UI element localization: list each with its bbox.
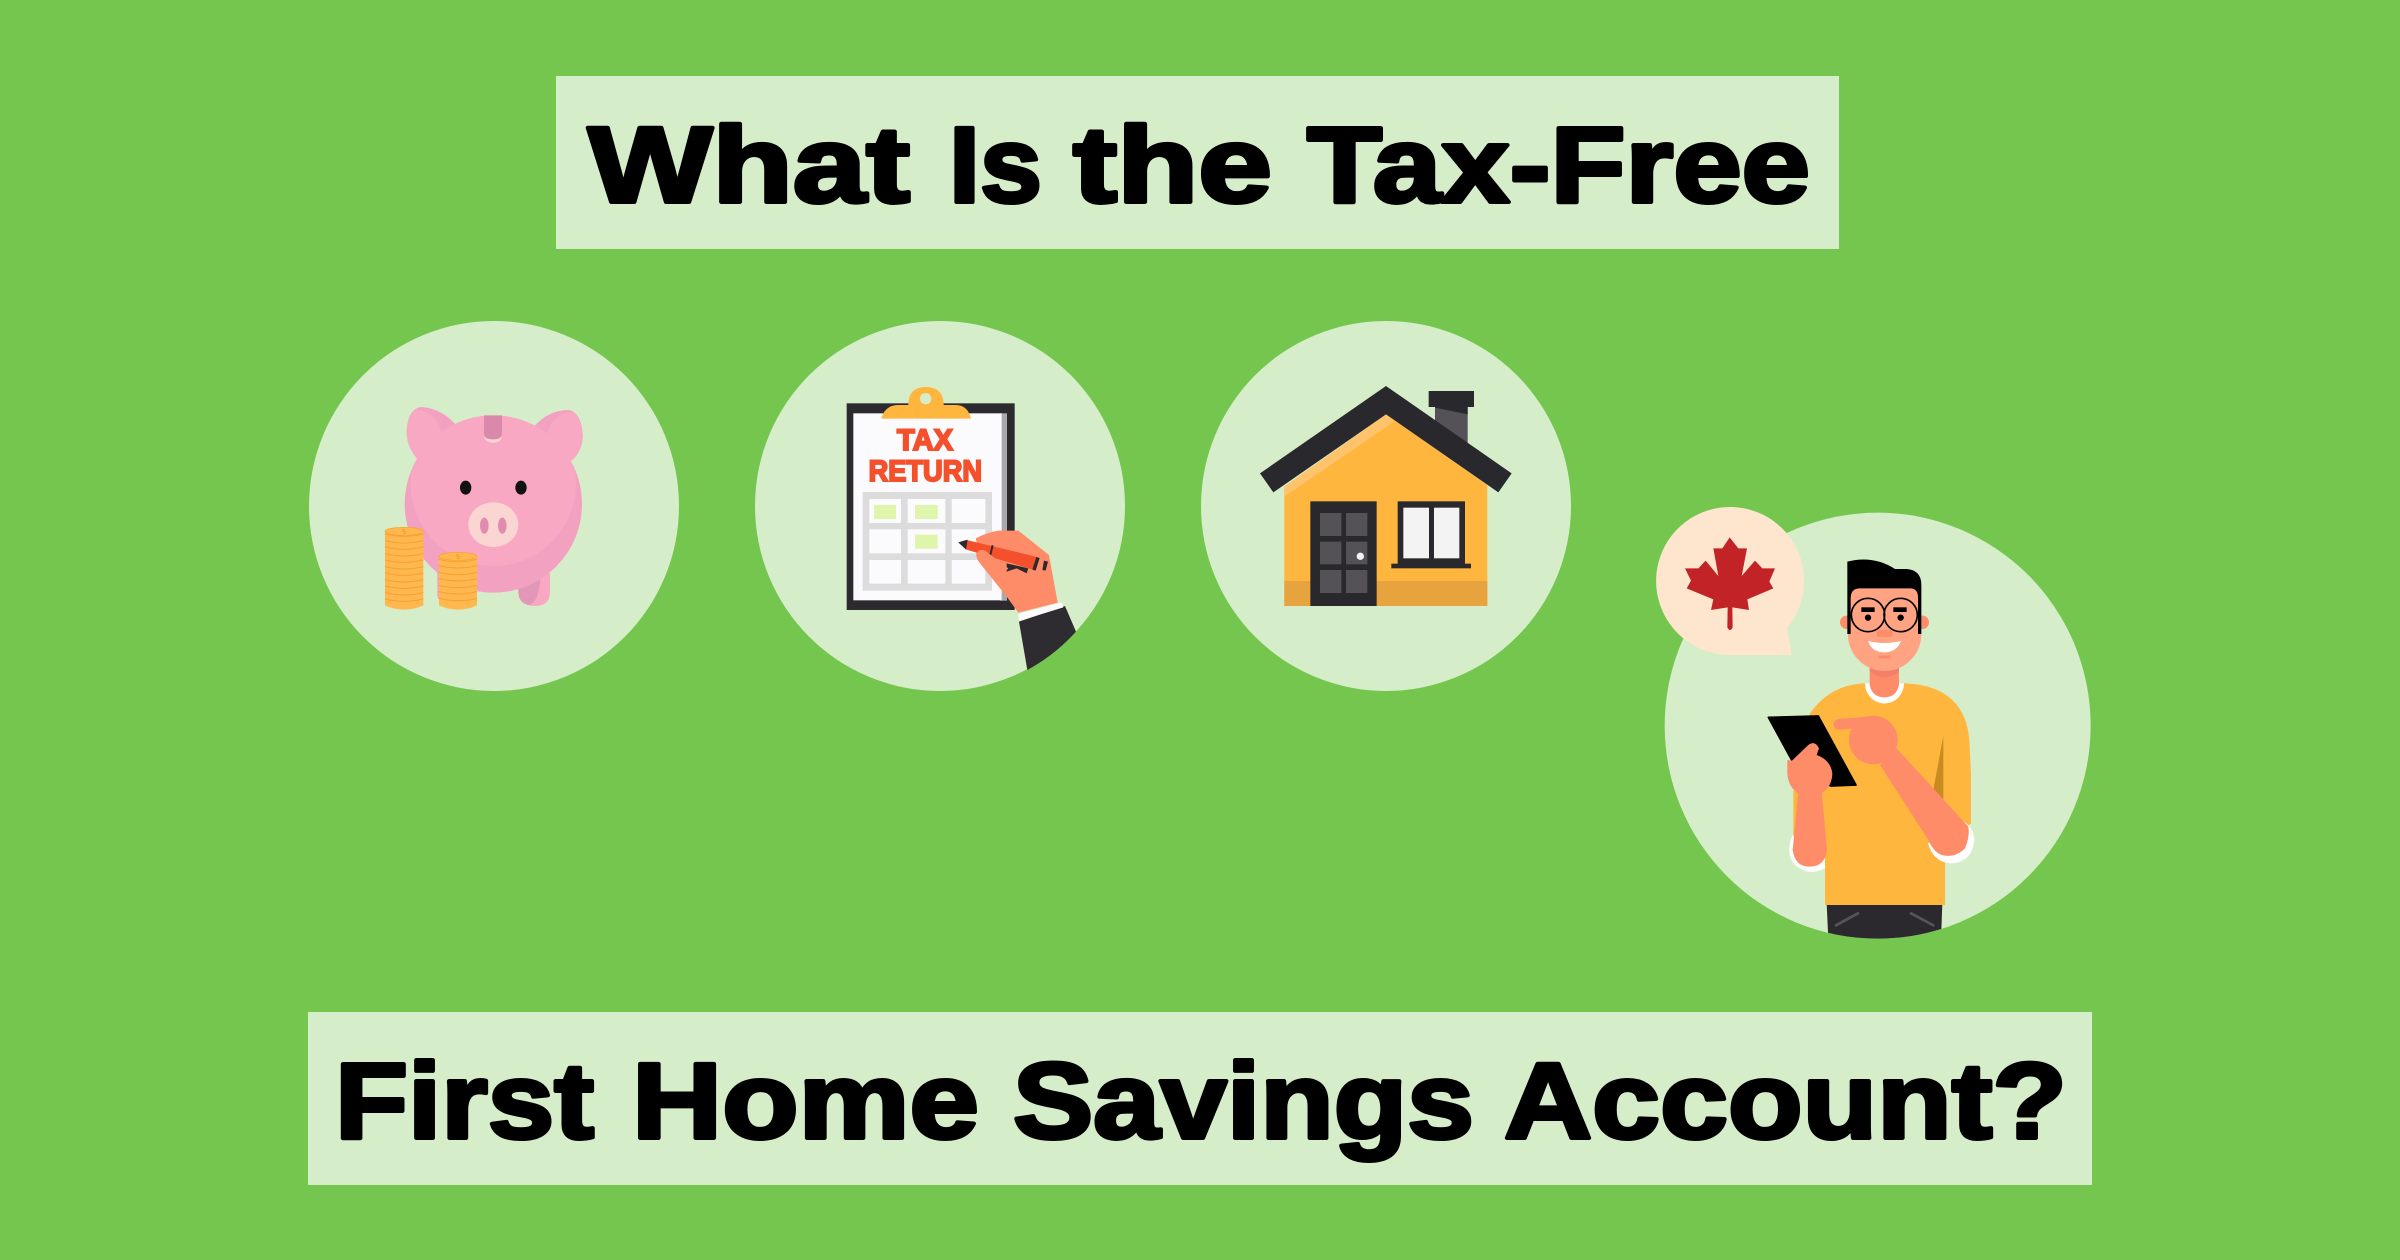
heading text: First Home Savings Account?: Savings: [1013, 1040, 1474, 1161]
clipboard clip: [881, 387, 971, 419]
heading text: What Is the Tax-Free: the: [1073, 104, 1272, 225]
hair: [1847, 560, 1921, 634]
icon: hand writing with pen: [958, 531, 1076, 670]
heading text: What Is the Tax-Free: Is: [949, 104, 1042, 225]
icon: maple leaf: [1685, 537, 1775, 630]
icon: tall coin stack: [385, 527, 423, 610]
chimney: [1429, 391, 1474, 445]
door: [1310, 501, 1377, 606]
window: [1391, 501, 1471, 568]
icon: short coin stack: $: [455, 552, 461, 561]
roof: [1260, 386, 1512, 492]
icon: tall coin stack: $: [401, 527, 407, 536]
form table: [863, 492, 992, 591]
heading text: What Is the Tax-Free: Tax-Free: [1307, 104, 1810, 225]
head: [1840, 560, 1929, 671]
neck: [1870, 667, 1899, 697]
panel: piggy bank circle: [309, 321, 679, 691]
title banner: top line: [556, 76, 1839, 249]
icon: short coin stack: [439, 552, 477, 610]
house walls: [1284, 414, 1487, 606]
right arm and pointing hand: [1839, 716, 1974, 863]
heading text: First Home Savings Account?: Account?: [1504, 1040, 2067, 1161]
shirt: [1793, 683, 1971, 905]
heading text: What Is the Tax-Free: What: [588, 104, 910, 225]
left arm and hand: [1787, 743, 1832, 872]
panel: person with tablet circle: [1656, 507, 2091, 940]
icon: piggy bank: [405, 401, 583, 606]
icon: house: [1260, 386, 1512, 606]
form heading: TAX RETURN: RETURN: [869, 455, 982, 488]
form heading: TAX RETURN: [869, 424, 982, 488]
title banner: bottom line: [308, 1012, 2092, 1185]
heading text: First Home Savings Account?: Home: [632, 1040, 979, 1161]
smile: [1868, 641, 1901, 652]
trousers: [1827, 903, 1942, 940]
heading text: What Is the Tax-Free: [588, 104, 1810, 225]
panel: tax return circle: [755, 321, 1125, 691]
glasses: [1851, 598, 1917, 632]
heading text: First Home Savings Account?: First: [335, 1040, 594, 1161]
heading text: First Home Savings Account?: [335, 1040, 2067, 1161]
form heading: TAX RETURN: TAX: [897, 424, 953, 457]
speech bubble with maple leaf: [1656, 507, 1804, 655]
icon: clipboard: [847, 387, 1015, 610]
figure: person: [1768, 560, 1974, 940]
panel: house circle: [1201, 321, 1571, 691]
tablet: [1768, 716, 1856, 786]
